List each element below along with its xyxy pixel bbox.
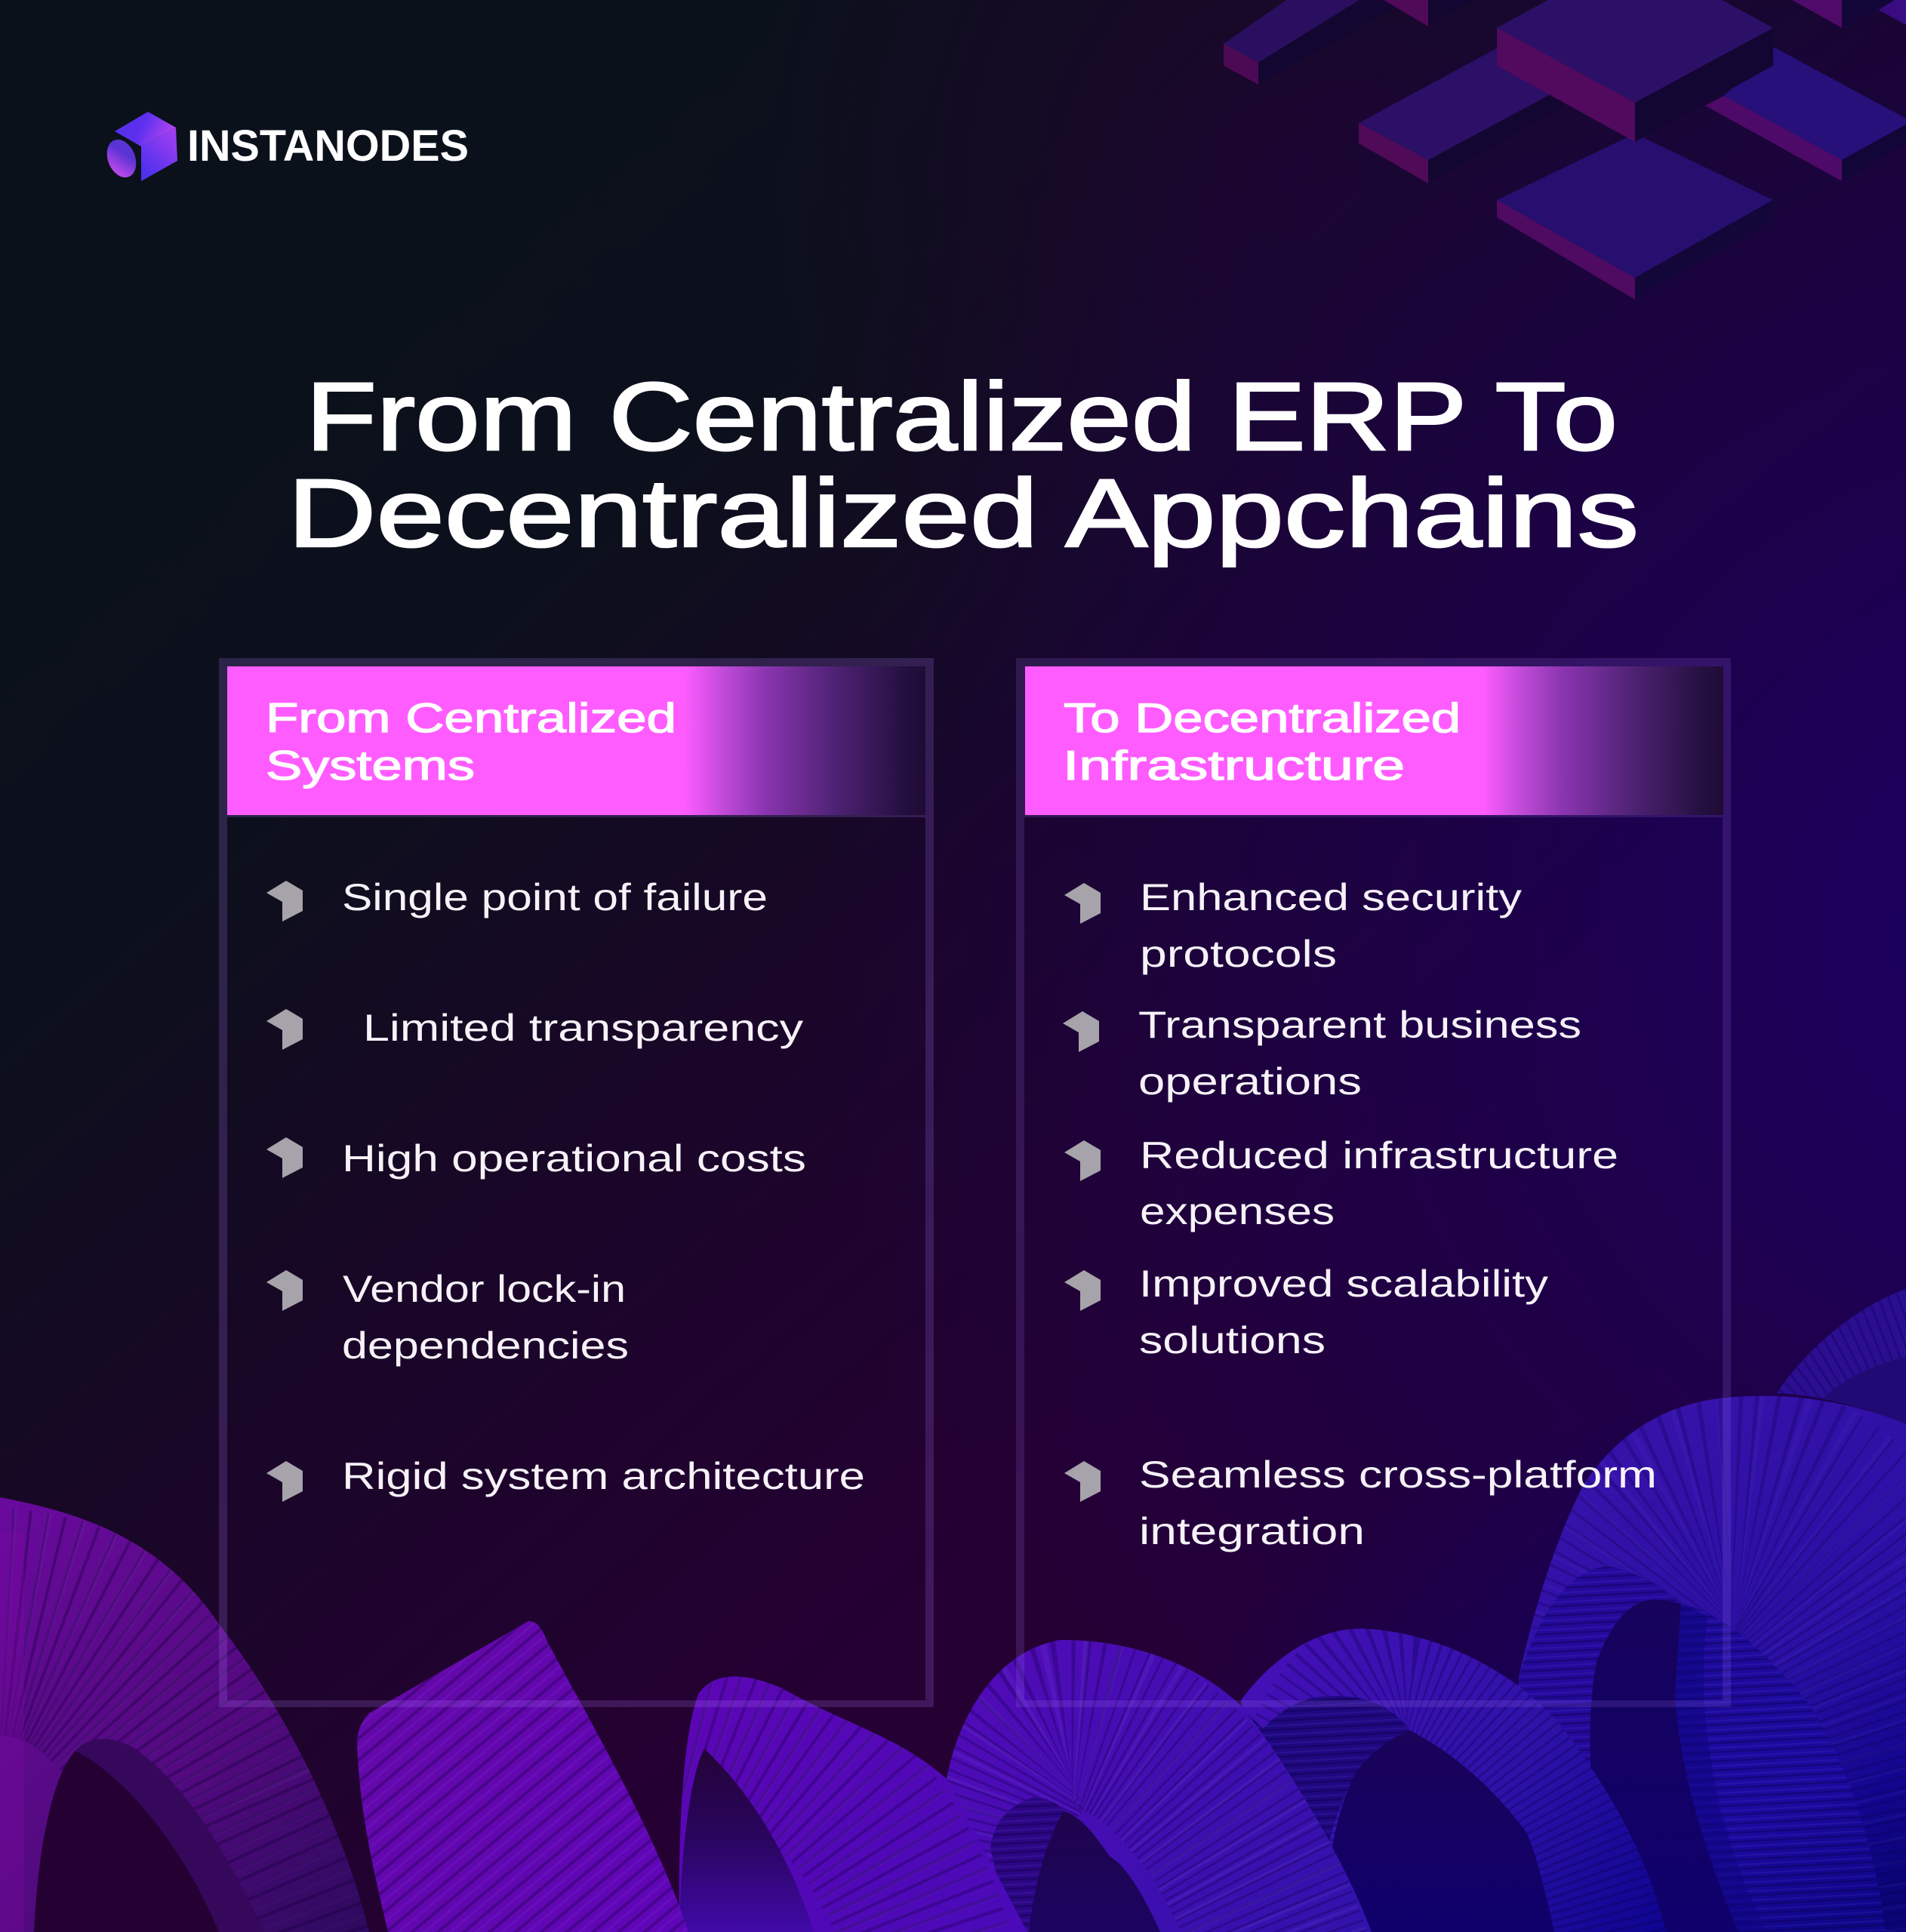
title [288, 363, 1639, 568]
panel header right [1025, 666, 1723, 815]
logo [102, 112, 469, 182]
arch 1 under-band [75, 1739, 264, 1932]
arch 3 ring stripes [702, 1713, 936, 1932]
arch 6 large [1510, 1389, 1906, 1932]
list item: vendor lock-in dependencies: Vendor lock-in [343, 1268, 626, 1310]
arch 4 ring stripes [973, 1721, 1291, 1932]
list item: limited transparency: Limited transparency [363, 1007, 803, 1049]
block: middle left [1359, 45, 1565, 183]
arch 5 under-band [1238, 1697, 1410, 1841]
list item: enhanced security protocols [1064, 876, 1522, 975]
brand name: INSTANODES [187, 122, 469, 171]
list item: single point of failure: Single point of failure [342, 876, 768, 918]
list item: transparent business operations [1063, 1004, 1581, 1103]
list item: seamless cross-platform integration: Seamless cross-platform [1139, 1454, 1657, 1496]
panel header right: Infrastructure [1063, 742, 1405, 789]
list item: vendor lock-in dependencies [266, 1268, 629, 1367]
block: top right [1792, 0, 1906, 28]
panel header left: Systems [266, 742, 475, 789]
list item: rigid system architecture [266, 1455, 865, 1502]
panel header left [227, 666, 925, 815]
panel: from centralized systems [219, 658, 934, 1707]
arch 4 [944, 1634, 1374, 1932]
list item: rigid system architecture: Rigid system architecture [342, 1455, 865, 1497]
list item: reduced infrastructure expenses [1064, 1134, 1618, 1232]
list item: transparent business operations: Transparent business [1138, 1004, 1581, 1046]
list item: transparent business operations: operations [1138, 1060, 1362, 1103]
panel frame left [219, 658, 934, 1707]
arch 6 ring stripes [1585, 1509, 1906, 1932]
block: thin top left [1224, 0, 1475, 85]
arch 2 [357, 1621, 688, 1932]
ribbon arches bottom [0, 1283, 1906, 1932]
arch 5 [1238, 1623, 1676, 1932]
arch 7 back right [1777, 1289, 1906, 1424]
list item: limited transparency [266, 1007, 803, 1050]
title: From Centralized ERP To [306, 363, 1618, 471]
list item: single point of failure [266, 876, 768, 921]
arch 1 [0, 1497, 369, 1932]
arch 3 [679, 1676, 1027, 1932]
list item: improved scalability solutions: solutions [1139, 1319, 1326, 1361]
arch 4 under-band [990, 1798, 1064, 1932]
arch 4 hole [1029, 1811, 1160, 1932]
list item: seamless cross-platform integration [1064, 1454, 1657, 1552]
list item: reduced infrastructure expenses: Reduced infrastructure [1140, 1134, 1618, 1177]
title: Decentralized Appchains [288, 460, 1639, 568]
header text right: To Decentralized [1064, 694, 1461, 741]
list item: high operational costs: High operational costs [342, 1137, 806, 1180]
list item: improved scalability solutions: Improved scalability [1139, 1263, 1548, 1305]
block: right [1705, 47, 1906, 181]
arch 3 hole [679, 1749, 814, 1932]
arch 6 hole [1585, 1599, 1738, 1932]
arch 1 hole [34, 1751, 219, 1932]
panel frame right [1016, 658, 1731, 1707]
list item: enhanced security protocols: protocols [1140, 933, 1337, 975]
panel: to decentralized infrastructure [1016, 658, 1731, 1707]
isometric blocks top right [1224, 0, 1906, 300]
arch 1 ring stripes [0, 1622, 287, 1932]
arch 5 hole [1322, 1730, 1554, 1932]
list item: vendor lock-in dependencies: dependencies [342, 1324, 629, 1367]
block: lower center [1497, 134, 1773, 300]
list item: enhanced security protocols: Enhanced security [1140, 876, 1522, 918]
arch 6 under-band [1510, 1567, 1681, 1811]
header text left: From Centralized [266, 694, 676, 741]
list item: improved scalability solutions [1064, 1263, 1548, 1361]
arch 6 inner face [1675, 1604, 1886, 1932]
icon: cube logo [102, 112, 177, 182]
list item: reduced infrastructure expenses: expenses [1140, 1190, 1335, 1232]
block: large center [1497, 0, 1773, 142]
list item: seamless cross-platform integration: integration [1139, 1510, 1365, 1552]
arch 5 ring stripes [1298, 1679, 1608, 1932]
list item: high operational costs [266, 1137, 806, 1180]
